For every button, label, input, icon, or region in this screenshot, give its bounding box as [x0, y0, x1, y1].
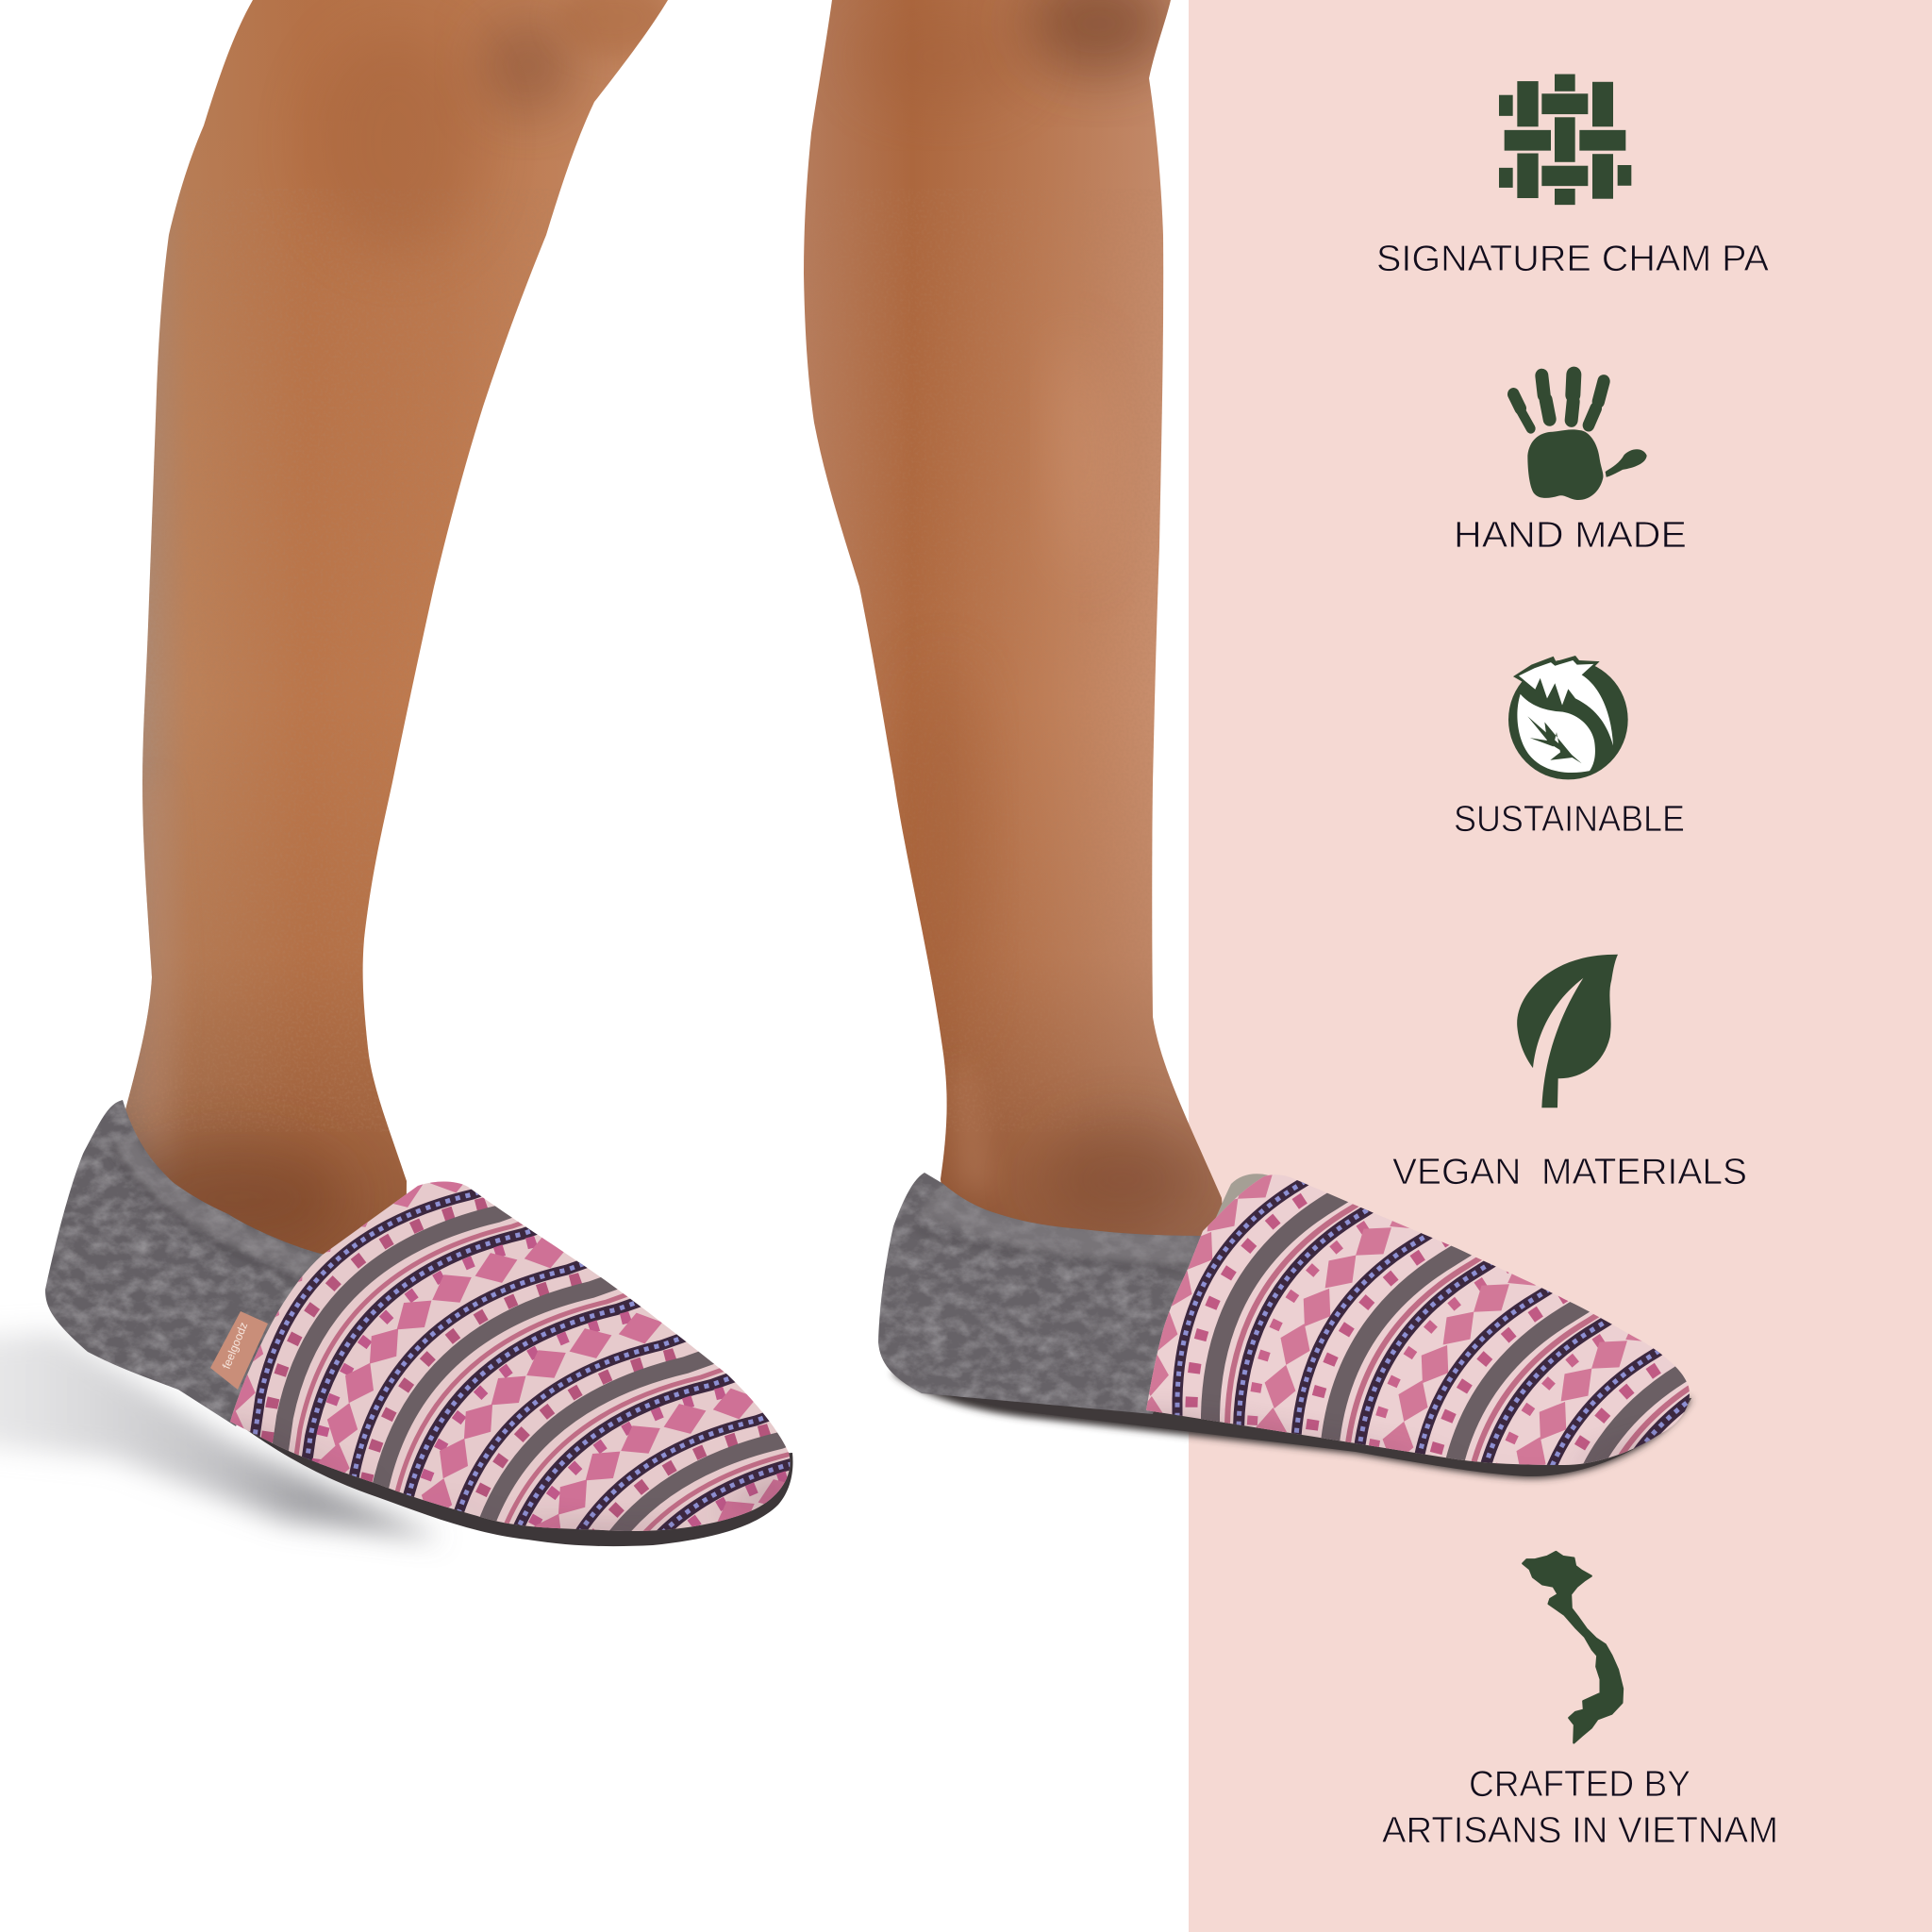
right slipper	[878, 1173, 1696, 1485]
right slipper fleece heel	[873, 1165, 1212, 1420]
right slipper sole	[943, 1394, 1691, 1476]
icon: map of vietnam	[1523, 1552, 1623, 1742]
icon: hand print	[1513, 375, 1647, 500]
icon: plant leaf	[1517, 955, 1618, 1108]
label: vegan materials: VEGAN MATERIALS	[1392, 1152, 1747, 1192]
label: crafted by artisans in vietnam	[1382, 1764, 1778, 1851]
left slipper fleece heel	[45, 1100, 323, 1426]
label: hand made: HAND MADE	[1454, 515, 1687, 556]
panel: pink background	[1189, 0, 1932, 1932]
left slipper sole	[233, 1420, 792, 1546]
right slipper soft shadow	[891, 1358, 1691, 1478]
left leg	[125, 0, 668, 1255]
right slipper lining	[1209, 1174, 1269, 1230]
brand tag: feelgoodz	[220, 1321, 250, 1371]
label: crafted by artisans in vietnam: ARTISANS IN VIETNAM	[1382, 1810, 1778, 1851]
left slipper patterned fabric	[230, 1181, 791, 1531]
label: signature cham pa: SIGNATURE CHAM PA	[1376, 239, 1769, 279]
icon: woven cham pa pattern	[1500, 75, 1631, 204]
brand tag	[210, 1311, 268, 1390]
icon: sustainable leaf badge	[1508, 656, 1628, 779]
label: sustainable: SUSTAINABLE	[1454, 799, 1685, 840]
right leg	[792, 0, 1236, 1274]
left slipper	[45, 1100, 792, 1547]
floor shadow under left slipper	[0, 1332, 443, 1540]
label: crafted by artisans in vietnam: CRAFTED BY	[1469, 1764, 1690, 1805]
right slipper patterned fabric	[974, 1040, 1862, 1720]
